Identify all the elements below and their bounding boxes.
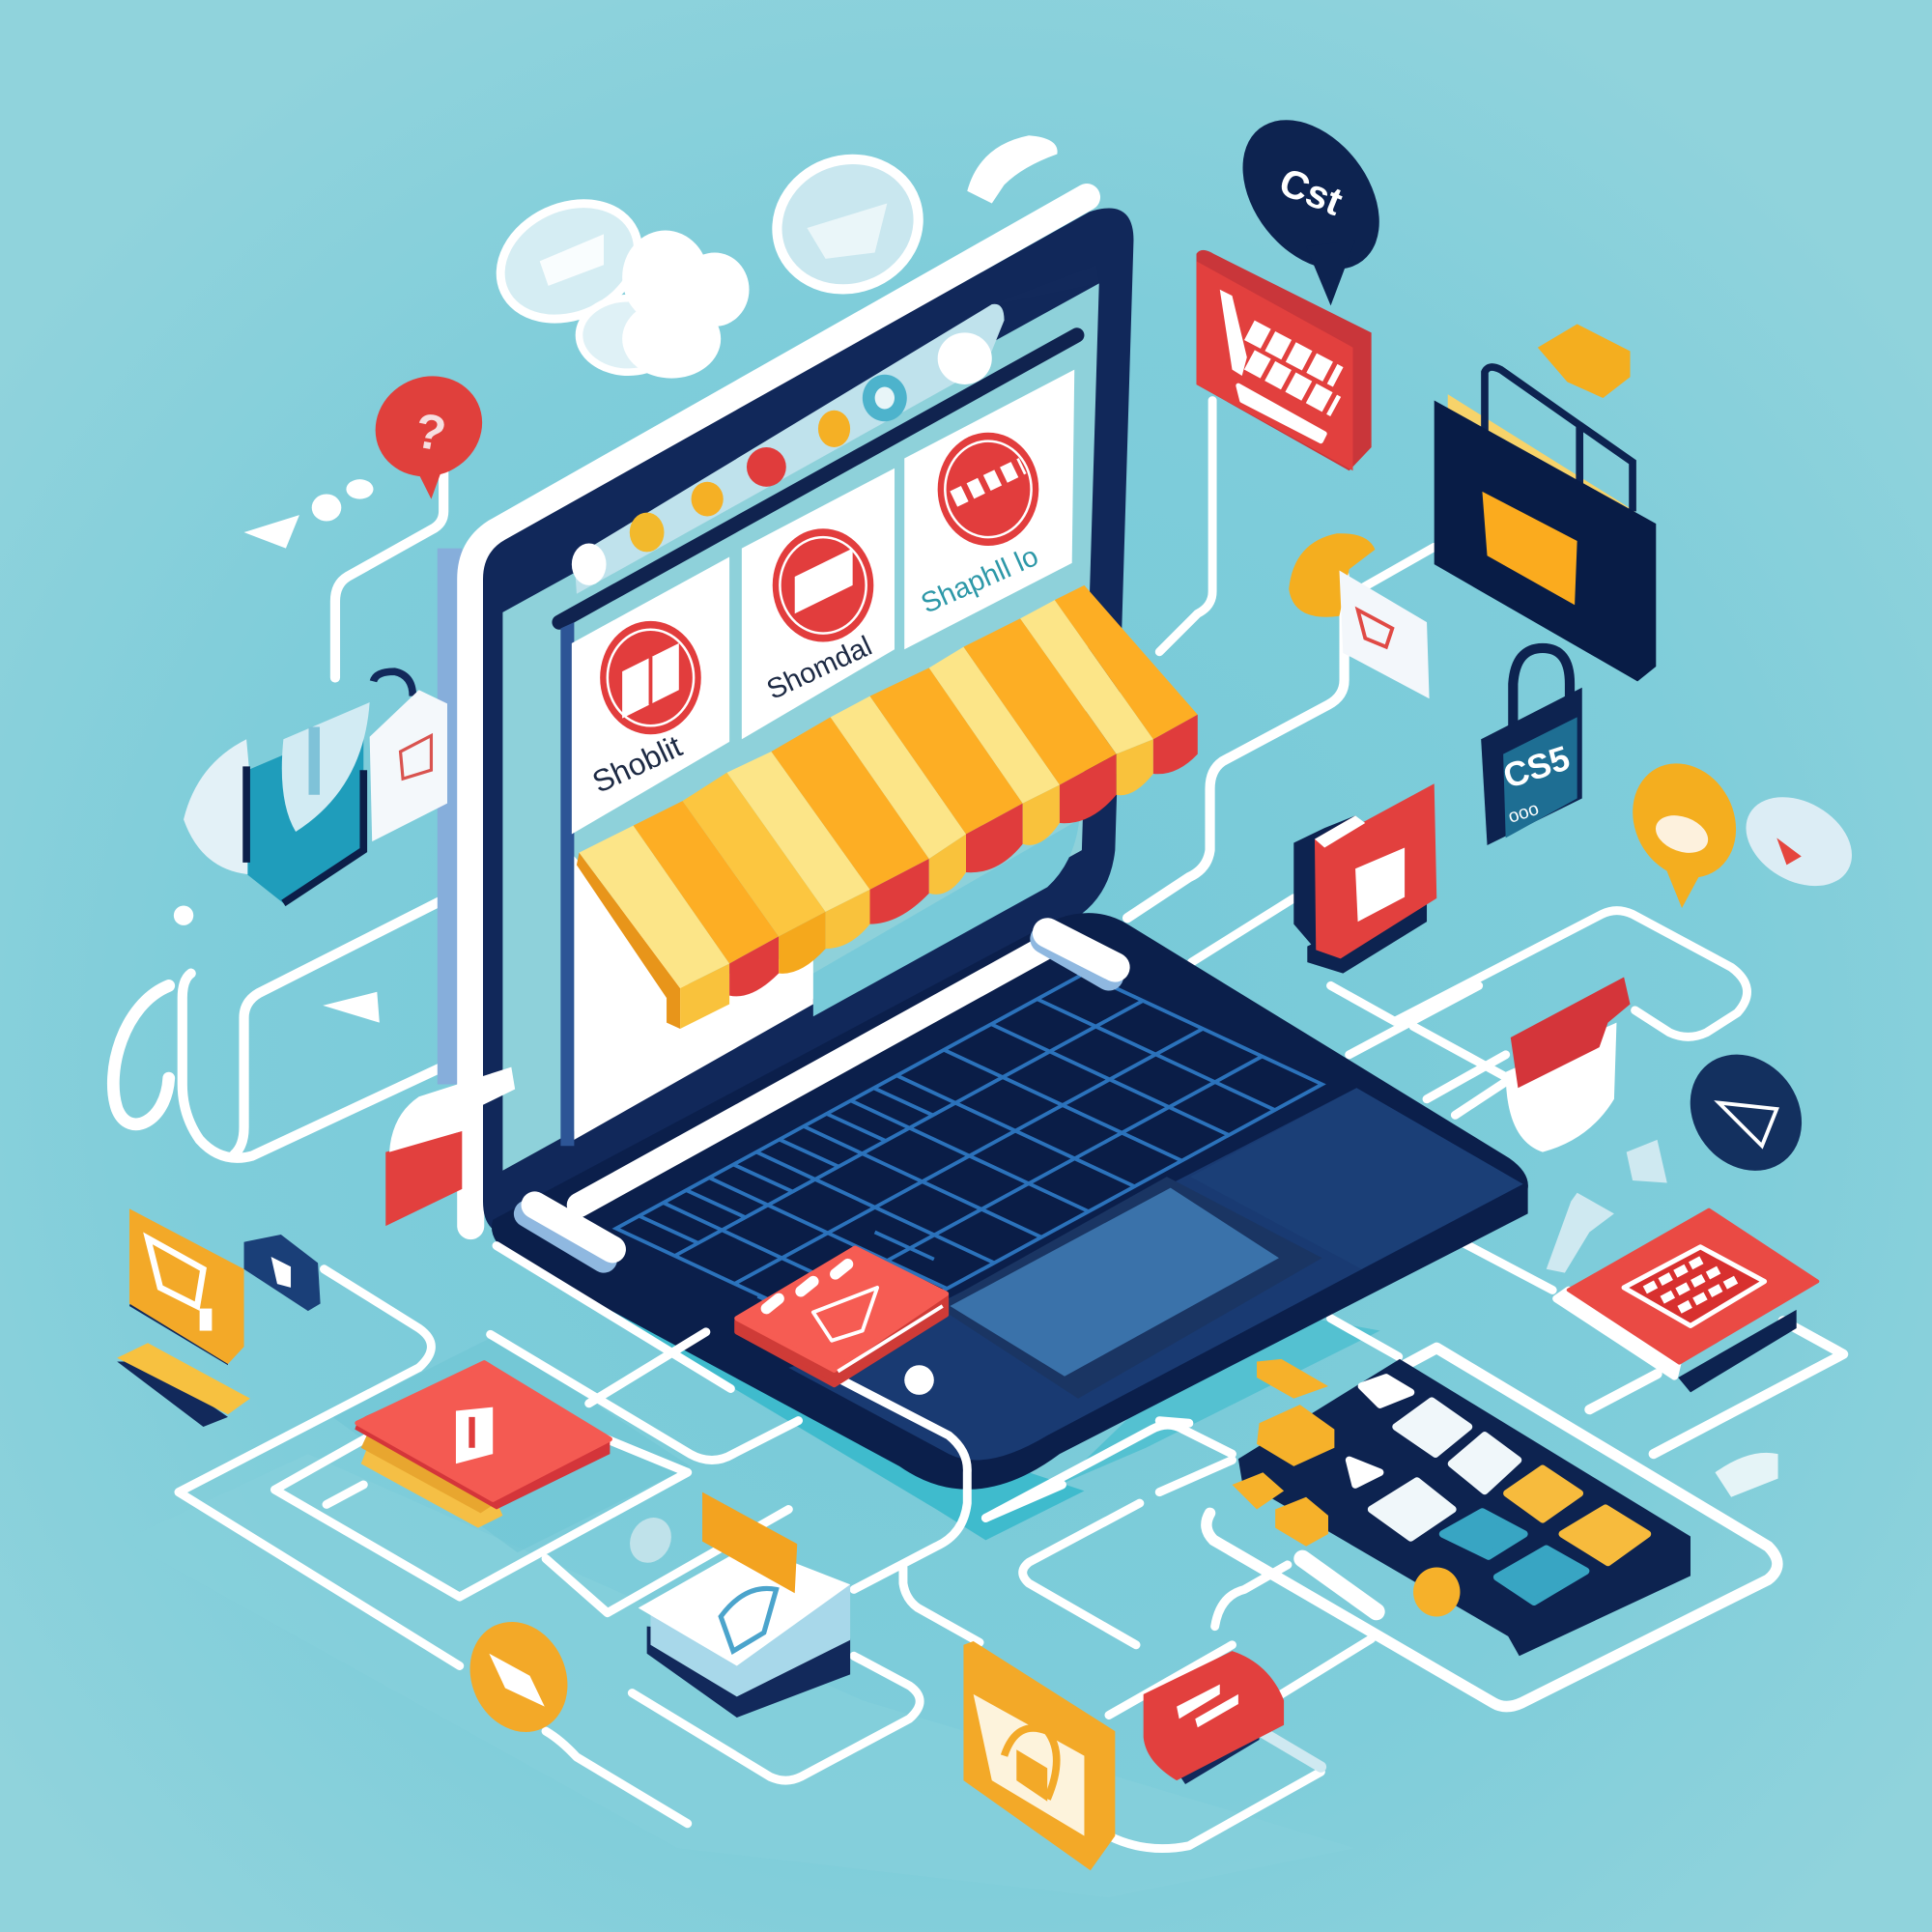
product card: Shaphll lo	[904, 370, 1074, 649]
icon: padlock bag: CS5	[1498, 738, 1575, 796]
icon: orange basket card	[963, 1641, 1115, 1870]
icon: red cart card	[1197, 250, 1372, 470]
hinge cap top	[1045, 933, 1115, 976]
laptop rim	[438, 197, 1087, 1226]
keyboard	[616, 974, 1322, 1339]
white bag wing	[184, 739, 259, 875]
product card: Shomdal	[742, 469, 895, 739]
icon: cloud	[579, 231, 750, 379]
icon: white speech bubble	[1730, 779, 1867, 904]
clouds and bubbles top	[482, 135, 1058, 379]
icon: yellow tag	[1538, 324, 1631, 398]
icon: small white bubble	[967, 135, 1058, 203]
laptop	[438, 197, 1528, 1589]
hinge bar	[579, 947, 1047, 1205]
icon: red book	[1293, 783, 1436, 974]
shopping bag cluster	[184, 671, 447, 903]
icon: yellow bar	[117, 1343, 250, 1427]
icon: yellow speech bubble	[1613, 745, 1755, 908]
keypad phone	[1233, 1359, 1690, 1656]
screen surface	[502, 265, 1099, 1171]
hinge cap bottom	[527, 1205, 612, 1260]
icon: red cart badge on laptop	[737, 1248, 947, 1385]
icon: red lock clasp	[385, 1067, 515, 1226]
icon: orange cart card	[129, 1208, 244, 1365]
product card: Shoblit	[572, 557, 729, 835]
connector lines	[113, 401, 1843, 1849]
icon: chat bubble receipt	[482, 182, 657, 341]
teal bag	[247, 721, 363, 903]
striped awning	[577, 585, 1198, 1029]
icon: small navy bag	[244, 1235, 321, 1311]
icon: red shopping bag square	[355, 1363, 610, 1528]
icon: chat dots	[174, 479, 380, 1023]
icon: padlock bag	[1481, 648, 1582, 845]
icon: red question bubble	[358, 358, 498, 499]
icon: red price tag	[1144, 1651, 1284, 1784]
icon: white box with orange sign	[639, 1492, 850, 1718]
pale shield	[282, 702, 370, 832]
product card: Shaphll lo: Shaphll lo	[917, 540, 1043, 620]
icon: yellow arc	[1289, 533, 1375, 617]
keypad yellow tabs	[1233, 1359, 1460, 1616]
keypad buttons	[1350, 1378, 1647, 1602]
laptop screen frame	[483, 208, 1133, 1235]
icon: pale diamonds	[1547, 1140, 1778, 1497]
trackpad dot	[904, 1365, 934, 1395]
product card: Shoblit: Shoblit	[587, 728, 687, 800]
browser toolbar dots	[572, 332, 992, 585]
icon: white cart tag	[1339, 571, 1430, 698]
laptop base	[492, 913, 1528, 1490]
touchpad	[950, 1188, 1279, 1377]
icon: navy shopping bag	[1435, 367, 1656, 681]
icon: chat bubble cart	[758, 140, 937, 309]
product card: Shomdal: Shomdal	[762, 630, 877, 706]
icon: red calendar card	[1556, 1210, 1817, 1392]
white box with red icon	[370, 671, 447, 841]
icon: red question bubble: ?	[411, 402, 450, 462]
icon: pale leaf	[622, 1510, 679, 1571]
cables over laptop	[497, 1246, 967, 1589]
icon: red and white cup	[1506, 977, 1631, 1152]
icon: yellow circle with truck	[452, 1605, 585, 1748]
icon: navy speech bubble	[1215, 94, 1407, 305]
icon: navy circle badge	[1667, 1033, 1825, 1193]
icon: padlock bag: ooo	[1506, 799, 1542, 828]
icon: navy speech bubble: Cst	[1273, 159, 1350, 224]
